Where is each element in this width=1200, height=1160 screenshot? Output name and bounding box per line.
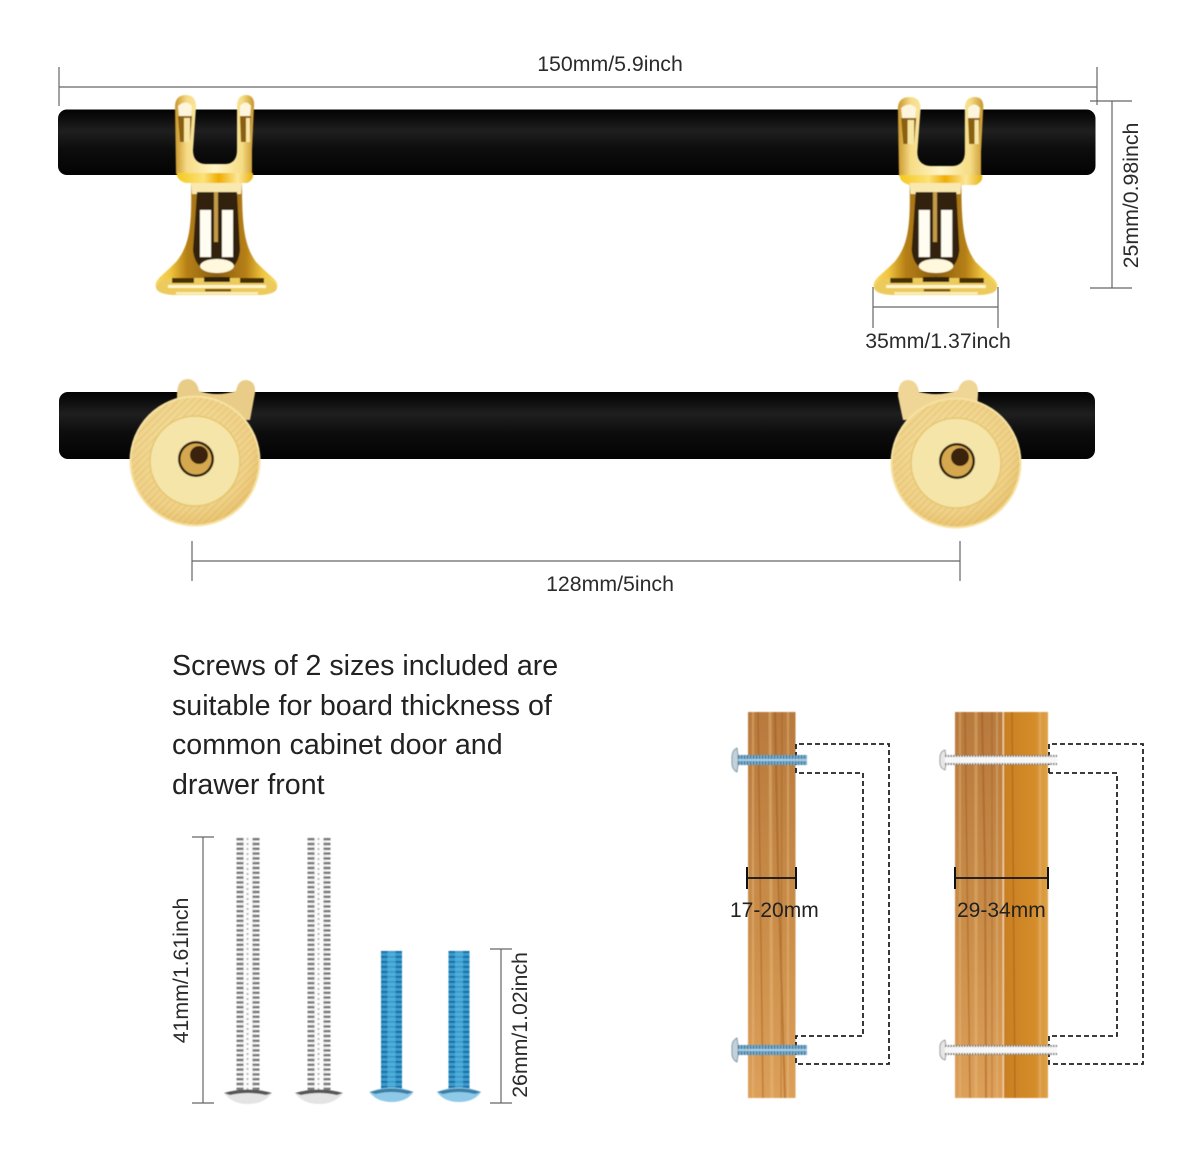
thickness marker xyxy=(747,867,796,889)
screws: two long silver xyxy=(224,838,343,1104)
black bar, front view xyxy=(58,110,1096,175)
dimension: hole spacing 128mm xyxy=(192,541,960,596)
dimension: short screw 26mm: 26mm/1.02inch xyxy=(508,952,532,1098)
text block: screws description: Screws of 2 sizes included are xyxy=(172,650,558,682)
handle: front view xyxy=(58,95,1096,295)
dimension: long screw 41mm: 41mm/1.61inch xyxy=(169,898,193,1043)
mounting diagram: thick board xyxy=(940,712,1143,1098)
dimension: base diameter 35mm xyxy=(865,287,1011,353)
dimension: hole spacing 128mm: 128mm/5inch xyxy=(546,572,674,596)
thickness label: 17-20mm xyxy=(730,899,819,922)
dashed handle outline xyxy=(1049,744,1143,1064)
dimension: short screw 26mm xyxy=(490,949,532,1103)
dashed handle outline xyxy=(796,744,889,1064)
silver screw, bottom xyxy=(940,1040,1057,1060)
wood board 17-20mm xyxy=(748,712,796,1098)
screws: two short blue xyxy=(370,951,481,1102)
left gold post xyxy=(156,95,277,295)
text block: screws description xyxy=(172,650,558,801)
black bar, back view xyxy=(59,392,1095,459)
text block: screws description: drawer front xyxy=(172,769,325,801)
left post behind plate xyxy=(177,379,255,420)
right post behind plate xyxy=(898,380,978,420)
right mounting plate xyxy=(890,398,1022,528)
thickness label: 29-34mm xyxy=(957,899,1046,922)
mounting diagram: thin board xyxy=(730,712,889,1098)
handle: back view xyxy=(59,379,1095,528)
dimension: height 25mm: 25mm/0.98inch xyxy=(1119,123,1143,268)
dimension: base diameter 35mm: 35mm/1.37inch xyxy=(865,329,1011,353)
right gold post xyxy=(874,97,997,295)
silver screw, top xyxy=(940,750,1057,770)
blue screw, bottom xyxy=(732,1038,807,1062)
text block: screws description: suitable for board thickness of xyxy=(172,690,552,722)
dimension: overall length 150mm: 150mm/5.9inch xyxy=(537,52,683,76)
blue screw, top xyxy=(732,748,807,772)
dimension: overall length 150mm xyxy=(59,52,1097,106)
text block: screws description: common cabinet door and xyxy=(172,729,503,761)
thickness marker xyxy=(955,867,1048,889)
left mounting plate xyxy=(130,396,260,526)
wood board 29-34mm xyxy=(955,712,1048,1098)
dimension: height 25mm xyxy=(1090,101,1143,288)
dimension: long screw 41mm xyxy=(169,837,214,1103)
